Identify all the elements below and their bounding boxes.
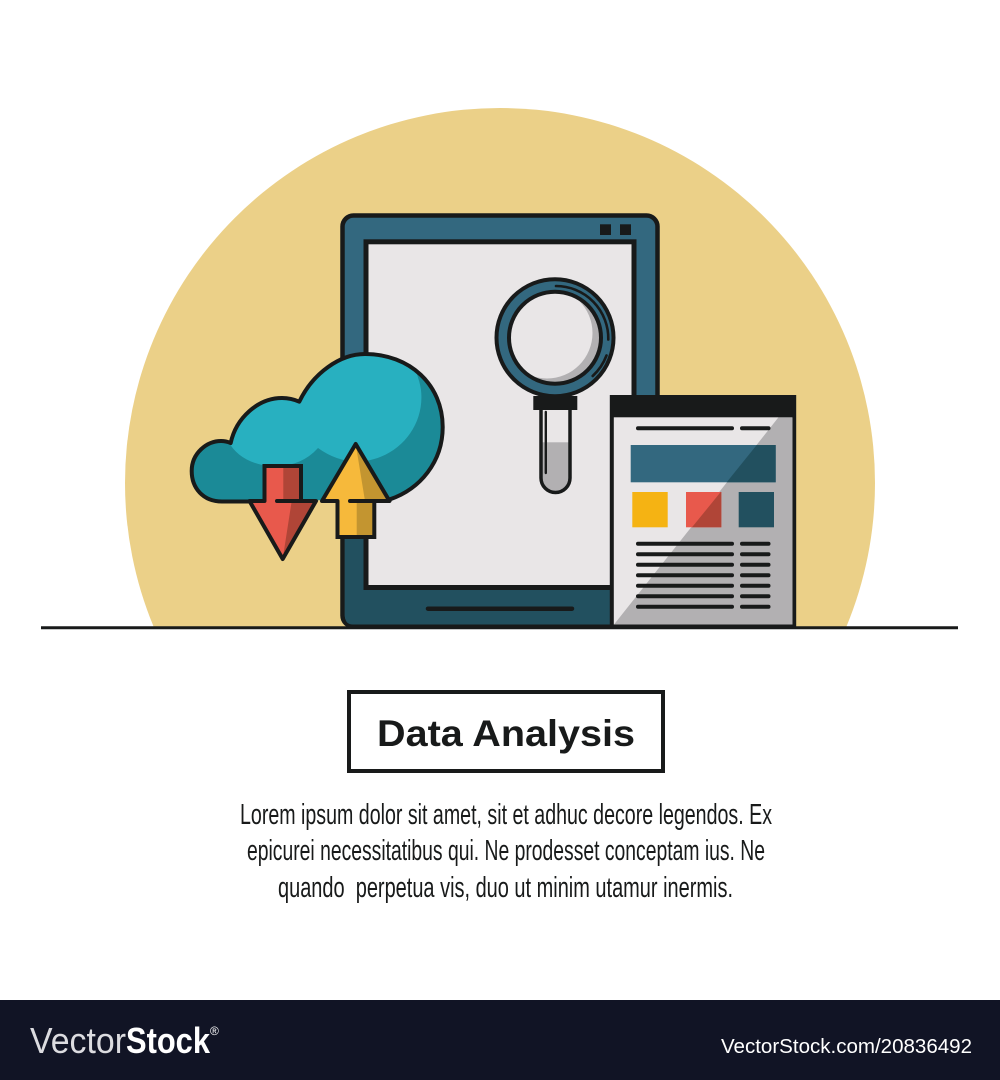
upload arrow [322, 444, 390, 537]
magnifier lens [502, 288, 601, 384]
magnifying glass [496, 279, 614, 494]
document banner [631, 445, 776, 482]
tablet home bar [428, 606, 572, 611]
document text lines [638, 544, 768, 607]
ring highlights [556, 286, 608, 376]
footer logo: Stock [126, 1020, 211, 1061]
title box [349, 692, 663, 771]
title: Data Analysis [377, 713, 635, 754]
teal square [739, 492, 774, 527]
magnifier handle tube [539, 410, 572, 494]
footer url: VectorStock.com/20836492 [721, 1036, 972, 1058]
tablet lower shade [345, 505, 654, 624]
document page shade [614, 417, 792, 624]
tablet screen [366, 242, 634, 588]
magnifier ring [496, 279, 614, 396]
background semicircle [125, 108, 875, 626]
tablet camera dots [600, 224, 631, 235]
body text: quando perpetua vis, duo ut minim utamur inermis. [278, 872, 733, 904]
document page [612, 397, 794, 626]
yellow square [632, 492, 668, 527]
cloud [192, 340, 443, 502]
document panel [610, 396, 796, 626]
tablet [342, 216, 658, 626]
ground line [41, 626, 958, 629]
red square [686, 492, 721, 527]
footer bar [0, 1000, 1000, 1080]
document header bar [610, 396, 796, 417]
body text [240, 799, 772, 904]
download arrow [250, 466, 316, 559]
footer logo: Vector [30, 1020, 126, 1061]
document top line [638, 426, 768, 430]
footer logo [30, 1020, 219, 1061]
tablet body [342, 216, 658, 626]
footer logo: ® [210, 1024, 219, 1038]
magnifier neck [533, 396, 577, 410]
